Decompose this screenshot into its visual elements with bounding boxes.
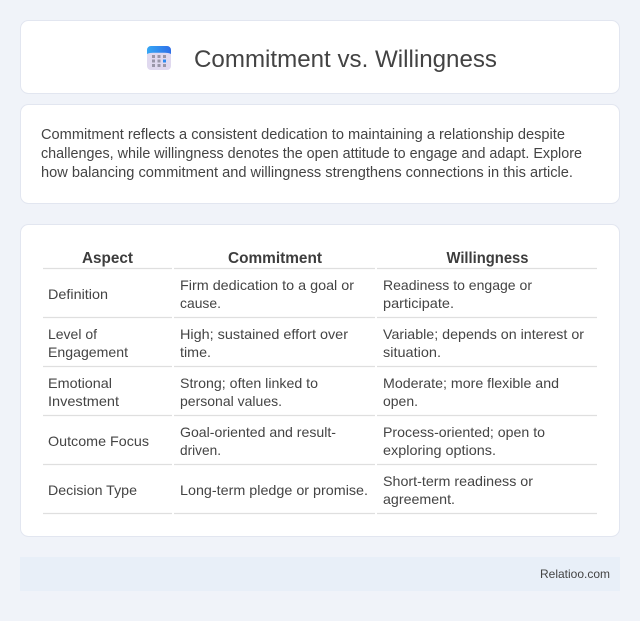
table header row: Aspect [82, 250, 134, 267]
table row: Definition: Definition [48, 286, 108, 302]
table row: Decision Type: Long-term pledge or promise. [180, 482, 368, 498]
table header row: Commitment [228, 250, 323, 267]
table row: Outcome Focus: Outcome Focus [48, 433, 149, 449]
text block: intro: how balancing commitment and willingness strengthens connections in this article. [41, 165, 573, 181]
panel: intro text [20, 104, 620, 204]
table row: Definition: Firm dedication to a goal or [180, 277, 354, 293]
table row: Emotional Investment: Emotional [48, 375, 112, 391]
table row: Level of Engagement: time. [180, 344, 211, 360]
footer: Relatioo.com [540, 567, 610, 581]
table row: Outcome Focus [43, 424, 597, 464]
table row: Outcome Focus: exploring options. [383, 442, 496, 458]
table row: Level of Engagement: Variable; depends on interest or [383, 326, 584, 342]
title: Commitment vs. Willingness [194, 46, 497, 73]
panel: comparison table [20, 224, 620, 536]
icon: calendar [147, 46, 171, 70]
table row: Emotional Investment: Moderate; more flexible and [383, 375, 559, 391]
table row: Emotional Investment: personal values. [180, 393, 282, 409]
table row: Emotional Investment [43, 375, 597, 416]
table header row [43, 250, 597, 268]
table header row: Willingness [446, 250, 529, 267]
text block: intro [41, 127, 582, 181]
table row: Level of Engagement: Engagement [48, 344, 128, 360]
text block: intro: challenges, while willingness denotes the open attitude to engage and adapt. Explore [41, 146, 582, 162]
table row: Emotional Investment: Investment [48, 393, 119, 409]
table row: Outcome Focus: driven. [180, 442, 221, 458]
table row: Level of Engagement: situation. [383, 344, 441, 360]
table row: Definition: Readiness to engage or [383, 277, 532, 293]
table row: Emotional Investment: open. [383, 393, 418, 409]
table row: Level of Engagement: High; sustained effort over [180, 326, 348, 342]
footer [20, 557, 620, 591]
table row: Decision Type: Short-term readiness or [383, 473, 533, 489]
table row: Decision Type: Decision Type [48, 482, 137, 498]
table row: Definition: cause. [180, 295, 221, 311]
panel: header [20, 20, 620, 94]
table row: Emotional Investment: Strong; often linked to [180, 375, 318, 391]
table row: Outcome Focus: Process-oriented; open to [383, 424, 545, 440]
table row: Decision Type: agreement. [383, 491, 455, 507]
table row: Decision Type [43, 473, 597, 514]
table row: Level of Engagement: Level of [48, 326, 97, 342]
table row: Level of Engagement [43, 326, 597, 366]
table row: Definition: participate. [383, 295, 454, 311]
text block: intro: Commitment reflects a consistent dedication to maintaining a relationship despite [41, 127, 565, 143]
table row: Outcome Focus: Goal-oriented and result- [180, 424, 336, 440]
table row: Definition [43, 277, 597, 318]
